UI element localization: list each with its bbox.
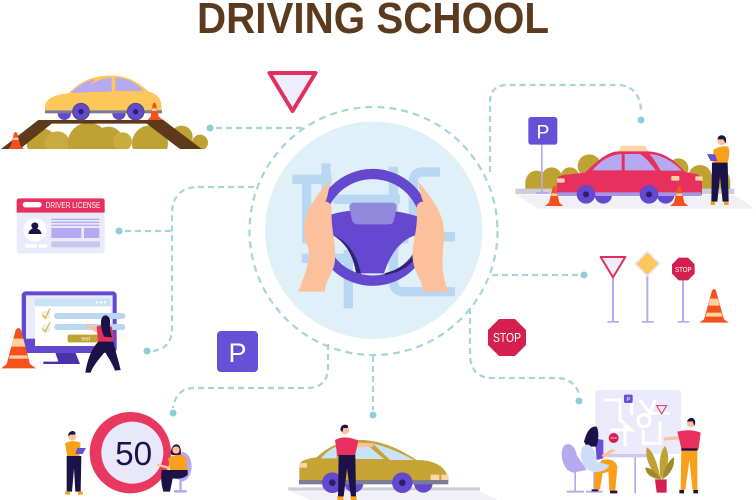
scene: yellow car on ramp <box>0 76 213 172</box>
bushes <box>0 123 213 172</box>
stop post: STOP <box>675 267 692 274</box>
scene: gold car with man <box>288 425 498 500</box>
parking sign: P <box>537 123 549 144</box>
map board: P <box>626 397 630 403</box>
central circle: steering wheel <box>265 122 482 339</box>
scene: road signs <box>601 250 729 323</box>
bushes <box>525 154 730 193</box>
woman seated <box>157 444 192 493</box>
cone <box>545 186 563 206</box>
yield post <box>601 257 625 323</box>
central dashed ring <box>250 107 498 355</box>
man with tablet <box>65 431 86 495</box>
yield sign <box>270 73 316 111</box>
ground <box>515 189 734 194</box>
stop sign <box>488 319 526 356</box>
car <box>45 76 162 120</box>
chairs <box>562 444 603 493</box>
scene: red taxi with parking sign <box>515 117 755 209</box>
scene: driver license: DRIVER LICENSE <box>46 201 100 210</box>
cone <box>670 186 688 206</box>
parking sign <box>217 331 258 372</box>
presenter <box>663 418 701 493</box>
cone <box>1 328 36 368</box>
cone <box>8 132 24 149</box>
scene: driver license <box>17 198 105 253</box>
connector lines <box>125 85 641 410</box>
plant <box>645 446 674 493</box>
steering wheel <box>319 174 426 281</box>
instructor <box>707 135 729 205</box>
scene: map presentation <box>562 390 701 493</box>
road pattern <box>292 163 455 308</box>
woman <box>85 315 121 373</box>
right hand <box>413 182 448 292</box>
map board <box>595 390 681 493</box>
ground <box>288 487 480 491</box>
scene: computer test <box>1 291 125 373</box>
man <box>335 425 373 500</box>
diamond post <box>634 250 661 323</box>
speed limit sign: 50 <box>115 436 152 473</box>
ramp <box>1 120 202 149</box>
taxi <box>557 146 703 204</box>
car <box>299 440 449 493</box>
parking sign <box>528 117 557 194</box>
cone <box>148 102 163 120</box>
left hand <box>298 182 335 292</box>
connector dots <box>116 116 644 418</box>
monitor: test <box>81 336 90 342</box>
woman seated <box>581 427 617 493</box>
stop sign: STOP <box>493 331 521 345</box>
map board: STOP <box>611 438 617 440</box>
cone <box>699 289 729 323</box>
scene: speed limit with people <box>65 412 192 495</box>
parking sign: P <box>228 338 247 368</box>
